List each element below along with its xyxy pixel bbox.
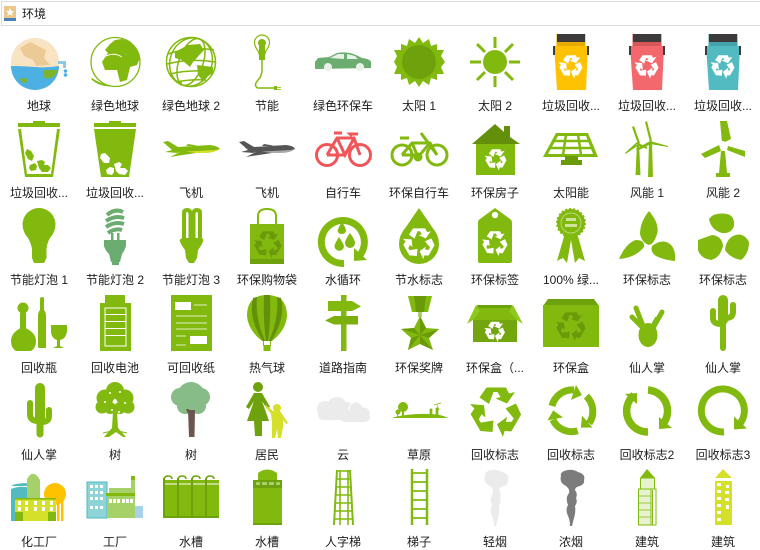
icon: yellow building [715,469,732,525]
icon: green house [472,124,520,175]
row 5 [21,382,751,462]
row 3 [10,208,749,287]
icon: a-frame ladder [334,470,353,525]
icon: green globe [91,38,140,86]
icon: open eco box [467,305,523,342]
icon: water tanks [163,476,219,518]
icon: sun star [394,37,445,87]
cell: ladder [407,469,431,549]
label: 道路指南 [319,360,367,375]
label: 节能灯泡 2 [86,273,144,287]
label: 人字梯 [325,534,361,549]
label: 环保自行车 [389,185,449,200]
cell: sun 1 [394,37,445,113]
cell: recycle mark [466,388,525,462]
label: 垃圾回收... [618,98,676,113]
cell: factory [87,476,143,549]
icon: grassland [392,402,448,418]
label: 太阳 2 [478,98,512,113]
icon: water cycle arrow with drops [321,221,367,264]
icon: eco box [543,299,599,347]
label: 回收标志2 [620,448,675,462]
icon: eco tag [478,208,512,263]
icon: green bicycle [392,133,447,165]
row 1 [11,32,752,113]
cell: badge [543,209,599,287]
icon: 100% green rosette [557,209,585,263]
label: 浓烟 [559,535,583,549]
label: 地球 [27,99,51,113]
label: 太阳能 [553,185,589,200]
icon: car [315,52,371,71]
label: 飞机 [179,186,203,200]
label: 回收电池 [91,361,139,375]
label: 节能灯泡 1 [10,273,68,287]
icon: two wind turbines [625,121,668,177]
label: 回收标志3 [696,448,751,462]
icon: round tree [171,382,210,437]
cell: green globe [91,38,140,113]
icon: gray plane [239,141,295,157]
cell: red bin [618,34,676,113]
icon: tube bulb [180,208,204,263]
label: 回收标志 [471,448,519,462]
cell: filled bin [86,121,144,200]
icon: dense smoke [561,470,584,526]
cell: outline bin [10,121,68,200]
label: 垃圾回收... [542,98,600,113]
icon: outline trash bin [18,121,60,177]
icon: red recycle bin [629,34,665,90]
cell: a-frame ladder [325,470,361,549]
icon: green plane [163,141,220,157]
icon: chemical plant [11,474,66,521]
label: 云 [337,448,349,462]
icon: factory [87,476,143,518]
cell: eco leaf 1 [619,211,675,287]
label: 自行车 [325,185,361,200]
cell: dense smoke [559,470,584,549]
label: 环保盒（... [466,360,524,375]
cell: wind 2 [701,121,745,200]
icon: three circular arrows [544,385,605,441]
cell: eco leaf 2 [698,214,749,287]
icon: leafy tree with roots [96,382,134,437]
icon: library folder [4,6,16,21]
cell: battery [91,295,139,375]
label: 回收瓶 [21,361,57,375]
icon: sun rays [470,37,520,87]
icon: teal recycle bin [705,34,741,90]
label: 仙人掌 [705,361,741,375]
icon: solar panel [543,133,598,165]
icon: three leaves [619,211,675,261]
icon: bulb [22,208,56,263]
cell: green plane [163,141,220,200]
row 6 [11,469,735,549]
label: 仙人掌 [629,361,665,375]
label: 环保购物袋 [237,272,297,287]
icon: signpost [325,295,361,351]
icon: plug bulb [254,35,281,90]
label: 100% 绿... [543,272,599,287]
title: 环境 [22,6,46,21]
row 2 [10,121,745,200]
label: 水槽 [179,535,203,549]
label: 工厂 [103,535,127,549]
icon: wireframe globe [163,32,219,92]
label: 环保房子 [471,185,519,200]
label: 轻烟 [483,535,507,549]
cell: green bike [389,133,449,200]
icon: wind turbine [701,121,745,177]
icon: cactus [713,300,733,348]
cell: sun 2 [470,37,520,113]
cell: bulb 2 [86,211,144,287]
icon: red bicycle [316,133,370,166]
cell: green house [471,124,520,200]
label: 居民 [255,448,279,462]
cell: tree 2 [171,382,210,462]
label: 仙人掌 [21,448,57,462]
cell: residents [246,382,288,462]
cell: chemical plant [11,474,66,549]
label: 节水标志 [395,273,443,287]
cell: green globe 2 [162,32,220,113]
label: 飞机 [255,186,279,200]
label: 节能灯泡 3 [162,273,220,287]
cell: open box [466,305,524,375]
cell: box [543,299,599,375]
cell: bulb 1 [10,208,68,287]
cell: tree 1 [96,382,134,462]
label: 垃圾回收... [694,98,752,113]
label: 风能 2 [706,186,740,200]
cell: cactus 3 [21,388,57,462]
row 4 [11,295,741,375]
cell: wind 1 [625,121,668,200]
cell: teal bin [694,34,752,113]
label: 绿色地球 2 [162,98,220,113]
cell: recycle circle [544,385,605,462]
cell: tanks [163,476,219,549]
cell: recycle 2 [620,390,675,462]
icon: ring arrow [701,389,747,432]
cell: light smoke [483,470,508,549]
cell: paper [167,295,215,375]
icon: outline building [638,469,656,525]
label: 环保标签 [471,272,519,287]
icon: ladder [412,469,427,525]
label: 草原 [407,448,431,462]
icon: recycle water drop [399,208,439,264]
label: 风能 1 [630,186,664,200]
cell: eco tag [471,208,519,287]
icon: battery [100,295,131,351]
cell: cactus 1 [629,308,665,375]
label: 水循环 [325,273,361,287]
cell: signpost [319,295,367,375]
icon: filled trash bin [94,121,136,177]
cell: cloud [317,397,370,462]
label: 绿色地球 [91,98,139,113]
label: 环保标志 [623,273,671,287]
cell: green car [313,52,373,113]
cell: bulb 3 [162,208,220,287]
icon: cactus [632,308,662,347]
icon: light smoke [485,470,508,526]
icon: star medal [401,296,439,350]
label: 热气球 [249,360,285,375]
icon: tall tank [253,470,282,525]
icon: bottles and glass [11,297,67,351]
icon: shopping bag [250,209,284,264]
cell: solar panel [543,133,598,200]
cell: cactus 2 [705,300,741,375]
cell: water cycle [321,221,367,287]
cell: bag [237,209,297,287]
label: 树 [185,447,197,462]
label: 化工厂 [21,535,57,549]
cell: balloon [247,295,287,375]
cell: recycle 3 [696,389,751,462]
cell: yellow bin [542,34,600,113]
icon: tall cactus [30,388,49,434]
cell: bottles [11,297,67,375]
icon: spiral bulb [104,211,126,265]
header bar [1,1,760,26]
cell: water mark [395,208,443,287]
label: 回收标志 [547,448,595,462]
cell: building 2 [711,469,735,549]
icon: clouds [317,397,370,422]
icon: two circular arrows [625,390,672,432]
label: 太阳 1 [402,98,436,113]
label: 绿色环保车 [313,98,373,113]
cell: medal [395,296,443,375]
label: 垃圾回收... [10,185,68,200]
label: 节能 [255,99,279,113]
label: 垃圾回收... [86,185,144,200]
icon: yellow recycle bin [553,34,589,90]
icon: hot air balloon [247,295,287,351]
label: 树 [109,447,121,462]
cell: earth [11,38,67,113]
icon: three round leaves [698,214,749,260]
label: 水槽 [255,535,279,549]
cell: tank [253,470,282,549]
cell: grassland [392,402,448,462]
cell: energy saving [254,35,281,113]
label: 环保标志 [699,273,747,287]
label: 环保奖牌 [395,361,443,375]
cell: building 1 [635,469,659,549]
label: 建筑 [635,534,659,549]
cell: gray plane [239,141,295,200]
cell: red bike [316,133,370,200]
icon: mother and child [246,382,288,438]
label: 建筑 [711,534,735,549]
icon: earth with tap [11,38,67,90]
label: 环保盒 [553,360,589,375]
label: 梯子 [407,535,431,549]
label: 可回收纸 [167,361,215,375]
icon: recyclable paper [171,295,212,351]
icon: recycle triangle [466,388,525,439]
